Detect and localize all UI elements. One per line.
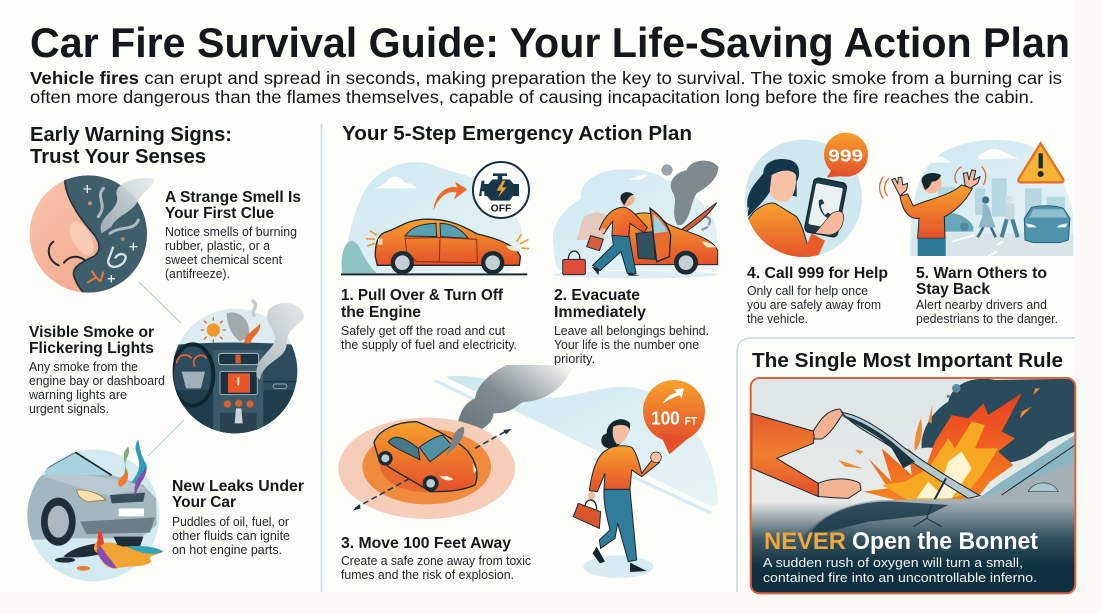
text: step 5 <box>916 265 1058 326</box>
text: step 4: 4. Call 999 for Help <box>747 265 888 282</box>
text: step 4: the vehicle. <box>747 311 808 326</box>
text: step 3: fumes and the risk of explosion. <box>341 567 514 582</box>
connector lines <box>139 282 184 456</box>
illustration: step 4 call 999 <box>745 133 868 260</box>
text: visible smoke: urgent signals. <box>29 401 109 416</box>
intro text: often more dangerous than the flames themselves, capable of causing incapacitation long before the fire reaches the cabin. <box>30 87 1034 107</box>
text: visible smoke: warning lights are <box>28 387 127 402</box>
illustration: step 3 move away: 100 FT <box>651 407 697 428</box>
heading: early warning signs: Early Warning Signs: <box>30 123 232 146</box>
callout: never open the bonnet <box>763 528 1038 585</box>
text: step 5: pedestrians to the danger. <box>916 311 1058 326</box>
illustration: step 5 warn others <box>880 140 1073 256</box>
panel: 5-step action plan <box>338 122 1073 582</box>
text: step 3: 3. Move 100 Feet Away <box>341 535 511 552</box>
heading: early warning signs <box>30 123 232 168</box>
text: step 3 <box>341 535 531 582</box>
callout: never open the bonnet: A sudden rush of oxygen will turn a small, <box>763 555 1023 570</box>
panel: most important rule <box>737 338 1075 593</box>
text: step 4: you are safely away from <box>747 297 881 312</box>
text: step 1: the Engine <box>341 304 421 321</box>
text: strange smell: Your First Clue <box>165 205 274 222</box>
intro text <box>30 68 1062 107</box>
text: visible smoke: Any smoke from the <box>29 359 138 374</box>
text: step 1: the supply of fuel and electricity. <box>341 337 517 352</box>
callout: never open the bonnet: Open the Bonnet <box>852 528 1038 555</box>
icon: nose smelling smoke <box>27 173 155 297</box>
text: step 3: Create a safe zone away from toxic <box>341 553 531 568</box>
text: step 1 <box>341 287 517 352</box>
heading: early warning signs: Trust Your Senses <box>30 145 206 168</box>
text: strange smell: (antifreeze). <box>165 266 230 281</box>
text: step 4: Only call for help once <box>747 283 868 298</box>
text: step 5: Alert nearby drivers and <box>916 297 1047 312</box>
text: visible smoke: Flickering Lights <box>29 340 154 357</box>
text: step 2: Immediately <box>554 304 646 321</box>
text: step 2: Your life is the number one <box>554 337 699 352</box>
text: strange smell: A Strange Smell Is <box>165 189 301 206</box>
title: Car Fire Survival Guide: Your Life-Saving Action Plan <box>30 19 1070 66</box>
heading: single most important rule: The Single Most Important Rule <box>752 349 1063 372</box>
icon: smoking dashboard <box>172 300 304 437</box>
text: new leaks: other fluids can ignite <box>172 528 290 543</box>
text: step 2 <box>554 287 709 366</box>
text: step 2: priority. <box>554 351 595 366</box>
text: step 5: 5. Warn Others to <box>916 265 1047 282</box>
text: strange smell: sweet chemical scent <box>165 252 282 267</box>
text: step 4 <box>747 265 888 326</box>
text: step 2: Leave all belongings behind. <box>554 323 709 338</box>
text: new leaks: New Leaks Under <box>172 478 304 495</box>
icon: car with leaking fluids <box>27 439 163 581</box>
text: new leaks: on hot engine parts. <box>172 542 282 557</box>
text: strange smell: Notice smells of burning <box>165 224 297 239</box>
text: step 5: Stay Back <box>916 281 990 298</box>
callout: never open the bonnet: contained fire into an uncontrollable inferno. <box>763 570 1037 585</box>
text: new leaks <box>172 478 304 557</box>
text: new leaks: Puddles of oil, fuel, or <box>172 514 290 529</box>
heading: action plan: Your 5-Step Emergency Action Plan <box>342 122 692 145</box>
text: visible smoke: Visible Smoke or <box>29 324 154 341</box>
text: visible smoke <box>28 324 165 416</box>
intro text: Vehicle fires can erupt and spread in seconds, making preparation the key to survival. The toxic smoke from a burning car is <box>30 68 1062 88</box>
illustration: step 4 call 999: 999 <box>828 145 863 165</box>
illustration: opening the bonnet on a fire <box>751 378 1075 593</box>
illustration: step 1 car and engine off <box>341 162 529 274</box>
panel: early warning signs <box>27 123 304 581</box>
text: new leaks: Your Car <box>172 494 236 511</box>
text: step 2: 2. Evacuate <box>554 287 640 304</box>
illustration: step 1 car and engine off: OFF <box>491 204 511 215</box>
text: step 1: 1. Pull Over & Turn Off <box>341 287 504 304</box>
text: visible smoke: engine bay or dashboard <box>29 373 165 388</box>
text: step 1: Safely get off the road and cut <box>341 323 505 338</box>
callout: never open the bonnet: NEVER <box>764 528 846 555</box>
text: strange smell: rubber, plastic, or a <box>165 238 271 253</box>
text: strange smell <box>165 189 301 281</box>
illustration: step 2 evacuate <box>552 161 718 278</box>
illustration: step 3 move away <box>338 365 718 578</box>
